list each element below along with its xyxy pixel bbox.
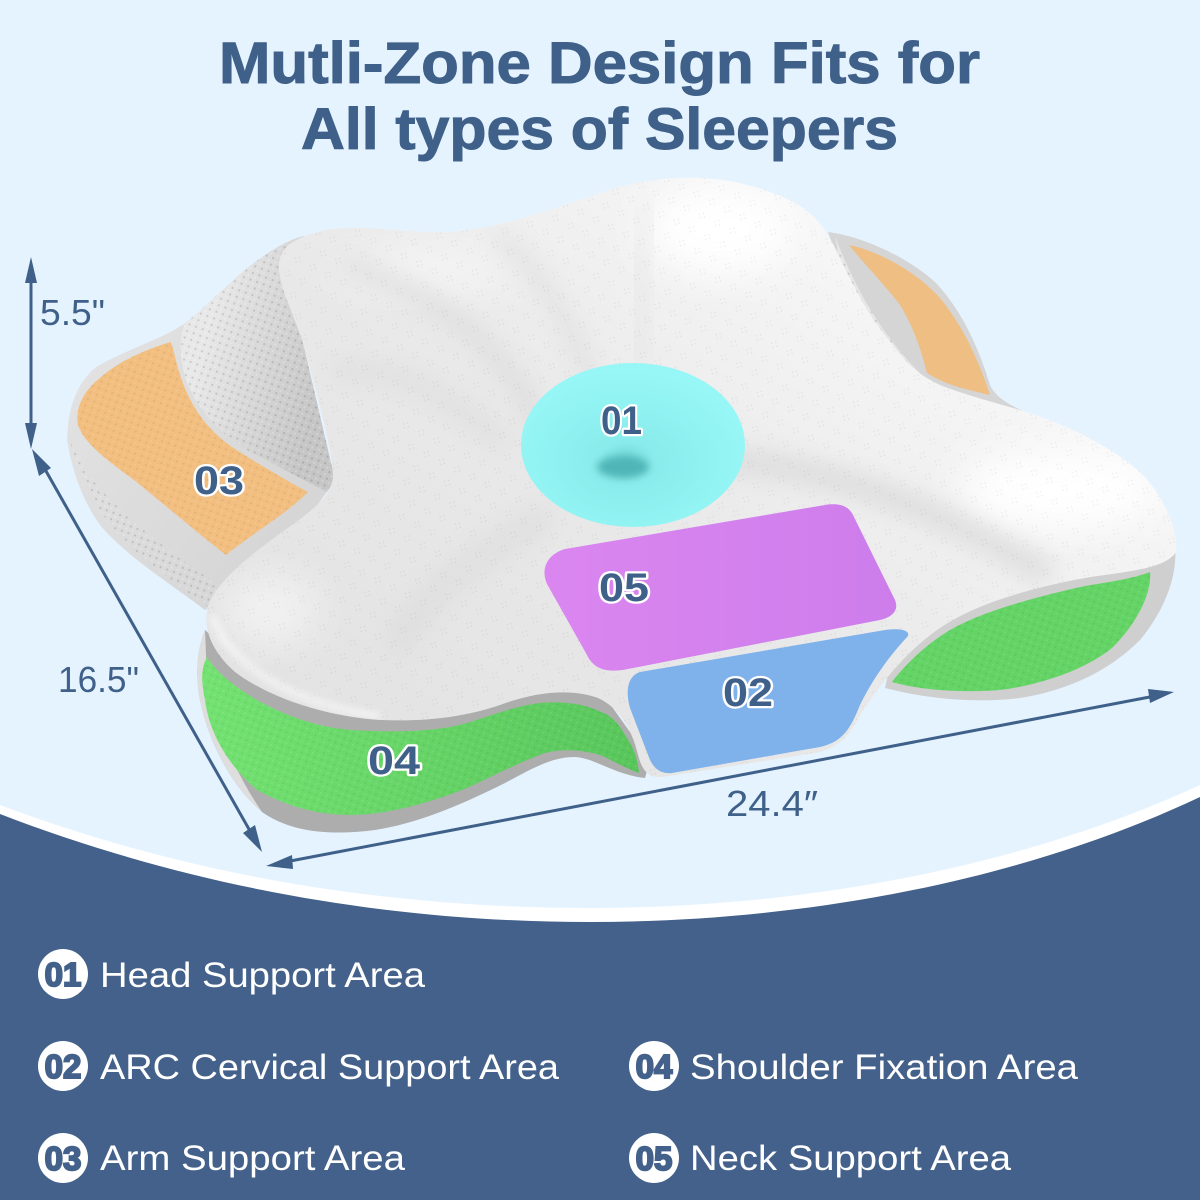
zone labels: 02 <box>723 671 773 715</box>
title: Mutli-Zone Design Fits for <box>219 31 980 96</box>
legend: 04 Shoulder Fixation Area: Shoulder Fixation Area <box>690 1048 1079 1087</box>
zone labels: 01 <box>601 399 642 443</box>
orange panel left <box>77 342 308 555</box>
legend: 03 Arm Support Area <box>38 1133 406 1183</box>
legend: 05 Neck Support Area: 05 <box>636 1140 672 1177</box>
left back arm <box>67 236 335 610</box>
legend: 02 ARC Cervical Support Area <box>38 1041 560 1091</box>
white top surface <box>190 170 1190 790</box>
legend: 05 Neck Support Area <box>629 1133 1012 1183</box>
right back arm <box>828 232 1025 430</box>
dimension arrow: height 5.5: 5.5" <box>40 292 105 333</box>
pillow <box>67 170 1190 833</box>
orange panel right <box>849 245 990 395</box>
dimension arrow: width 24.4: 24.4″ <box>726 783 818 824</box>
legend: 03 Arm Support Area: 03 <box>45 1140 81 1177</box>
dimension arrow: depth 16.5: 16.5" <box>58 659 139 700</box>
legend: 01 Head Support Area: Head Support Area <box>100 956 426 995</box>
legend: 02 ARC Cervical Support Area: 02 <box>45 1048 81 1085</box>
dimension arrow: height 5.5 <box>25 257 105 449</box>
front shell <box>197 630 650 833</box>
zone 02 blue <box>628 629 908 773</box>
zone labels: 04 <box>368 739 421 783</box>
title: All types of Sleepers <box>301 97 898 162</box>
legend: 04 Shoulder Fixation Area <box>629 1041 1079 1091</box>
legend: 05 Neck Support Area: Neck Support Area <box>690 1139 1012 1178</box>
zone labels: 05 <box>599 566 649 610</box>
bottom panel with white arc <box>0 785 1200 1200</box>
green panel front <box>202 657 639 815</box>
dimension arrow: width 24.4 <box>266 689 1174 869</box>
right side shell <box>885 545 1175 700</box>
legend: 01 Head Support Area: 01 <box>45 956 81 993</box>
legend: 04 Shoulder Fixation Area: 04 <box>636 1048 673 1085</box>
zone labels: 03 <box>194 459 244 503</box>
legend: 02 ARC Cervical Support Area: ARC Cervical Support Area <box>100 1048 560 1087</box>
zone 05 purple <box>544 504 896 671</box>
zone labels <box>194 399 773 783</box>
legend: 01 Head Support Area <box>38 949 426 999</box>
zone 01 cyan ellipse <box>521 363 745 527</box>
legend: 03 Arm Support Area: Arm Support Area <box>100 1139 406 1178</box>
title <box>219 31 980 162</box>
dimension arrow: depth 16.5 <box>32 449 262 852</box>
